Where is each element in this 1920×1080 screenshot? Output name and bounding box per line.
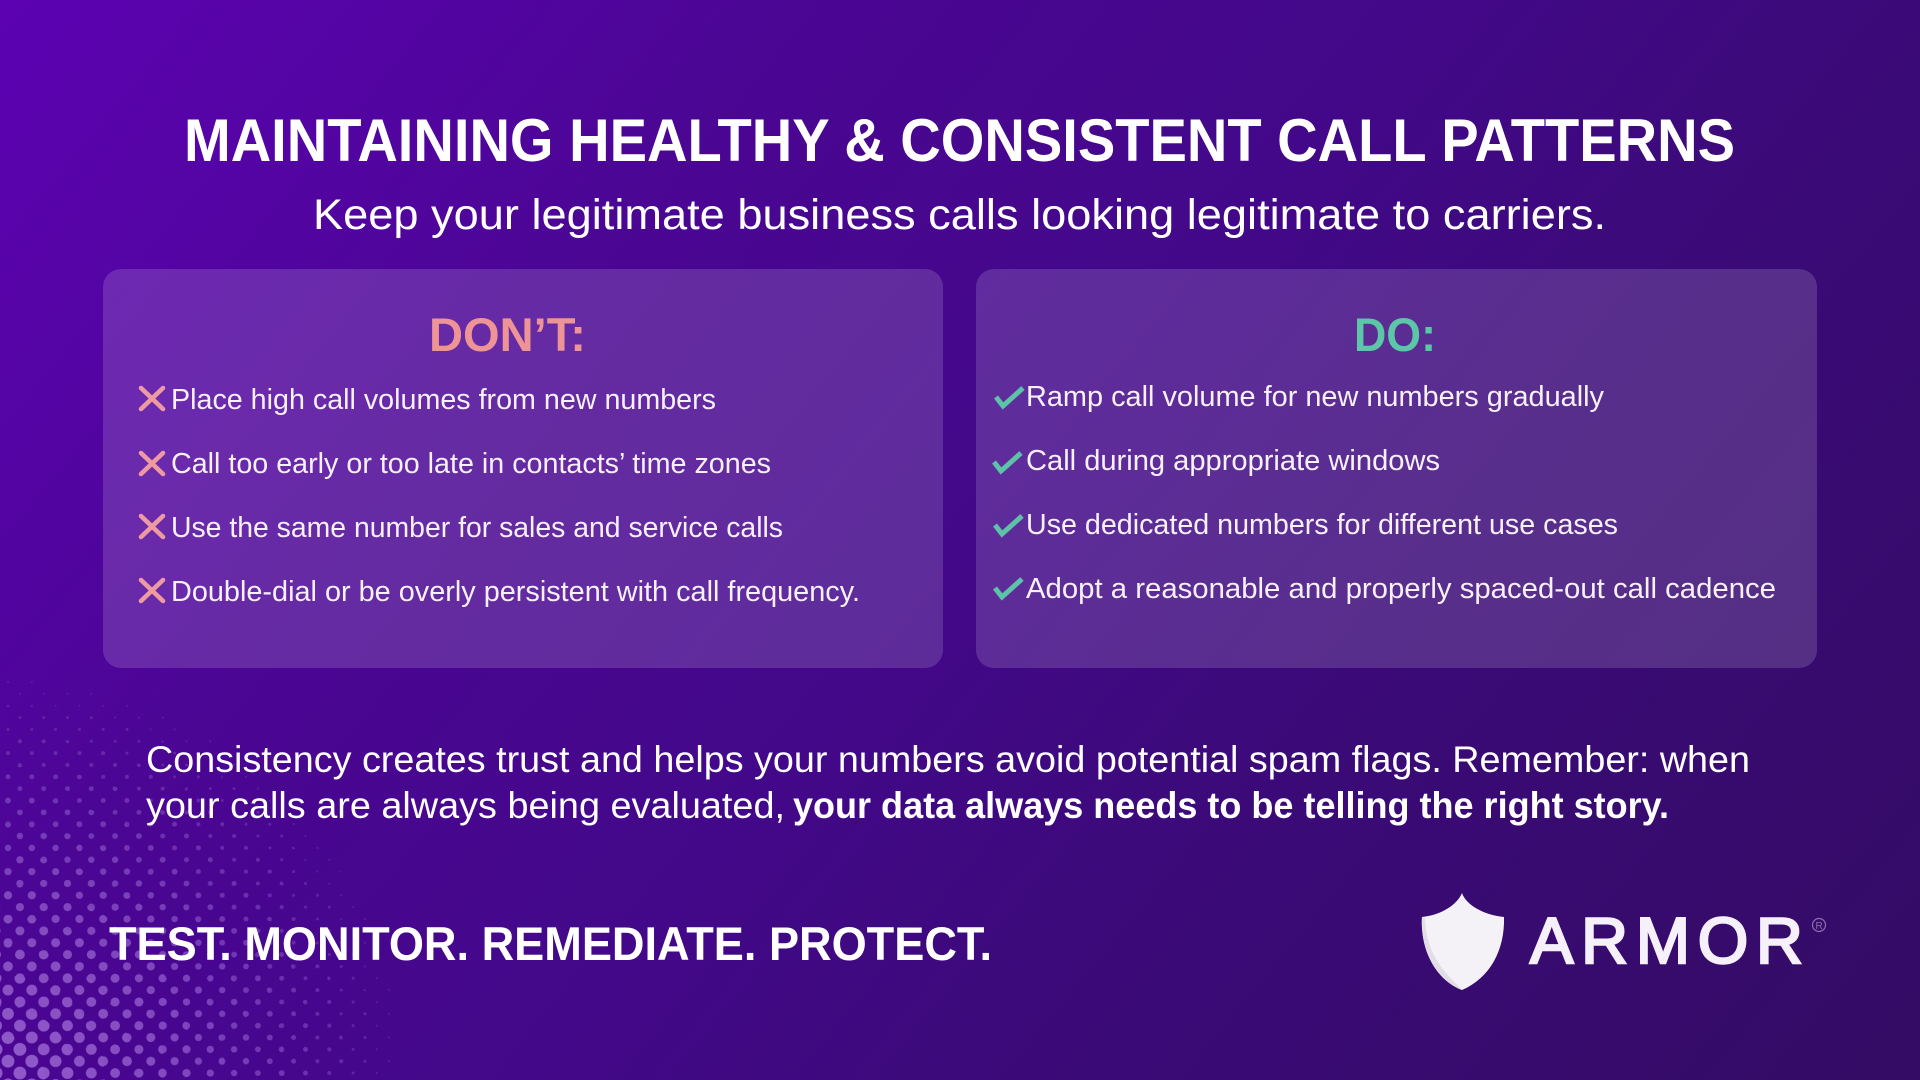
panel: do <box>976 269 1817 668</box>
list item: same number: Use the same number for sales and service calls <box>171 512 783 544</box>
subtitle: Keep your legitimate business calls looking legitimate to carriers. <box>313 191 1606 239</box>
panel: don't <box>103 269 943 668</box>
list item: appropriate windows: Call during appropriate windows <box>1026 445 1440 477</box>
tagline: TEST. MONITOR. REMEDIATE. PROTECT. <box>109 917 992 970</box>
wordmark: ARMOR <box>1530 904 1803 977</box>
body text: Consistency creates trust and helps your numbers avoid potential spam flags. Remember: when <box>146 739 1750 780</box>
heading: don't: DON’T: <box>429 308 586 361</box>
list item: ramp volume: Ramp call volume for new numbers gradually <box>1026 381 1604 413</box>
list item: high call volumes: Place high call volumes from new numbers <box>171 384 716 416</box>
body text: your calls are always being evaluated, <box>146 785 785 826</box>
body text <box>146 739 1750 826</box>
list item: dedicated numbers: Use dedicated numbers for different use cases <box>1026 509 1618 541</box>
body text: your data always needs to be telling the right story. <box>793 785 1669 826</box>
list item: time zones: Call too early or too late in contacts’ time zones <box>171 448 771 480</box>
icon: shield <box>1422 893 1504 990</box>
heading: do: DO: <box>1354 308 1436 361</box>
list item: double-dial: Double-dial or be overly persistent with call frequency. <box>171 576 860 608</box>
halftone dot pattern <box>0 680 400 1080</box>
title: MAINTAINING HEALTHY & CONSISTENT CALL PATTERNS <box>184 107 1735 174</box>
registered mark: R <box>1816 921 1823 932</box>
logo: armor <box>1422 893 1826 990</box>
list item: call cadence: Adopt a reasonable and properly spaced-out call cadence <box>1026 573 1776 605</box>
registered mark <box>1812 918 1826 932</box>
